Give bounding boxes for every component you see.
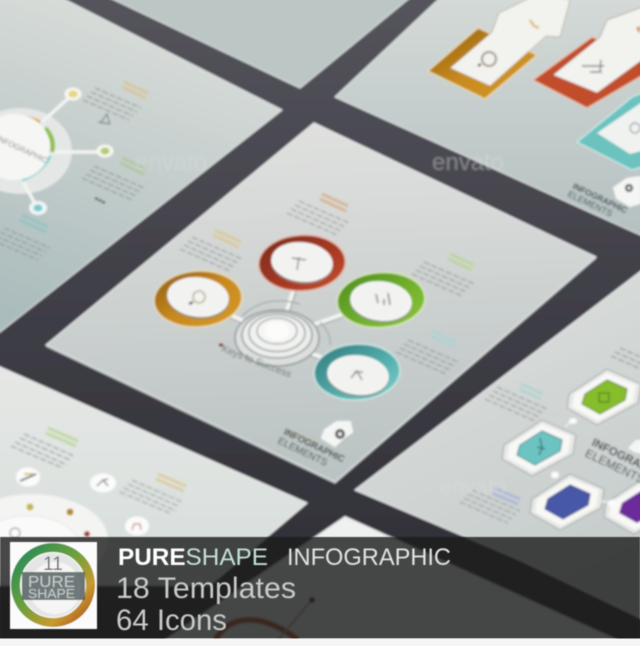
logo thumbnail xyxy=(10,542,97,629)
diagram: connector with node xyxy=(278,602,310,640)
watermark: envato xyxy=(432,149,504,176)
connector: green to hub xyxy=(310,311,352,328)
logo thumbnail: 11 xyxy=(43,554,63,575)
text: icons count: 64 Icons xyxy=(116,604,227,637)
node: red scales xyxy=(257,233,347,293)
panel: bottom left card xyxy=(0,365,307,586)
icon: tools xyxy=(376,293,390,305)
icon: tools bubble xyxy=(16,468,40,486)
logo thumbnail: SHAPE xyxy=(28,587,75,601)
logo thumbnail: PURE xyxy=(28,574,75,591)
bottom banner xyxy=(0,537,640,646)
diagram: hexagon green xyxy=(567,369,640,425)
text block: yellow heading xyxy=(120,474,186,514)
text block: green heading xyxy=(11,428,78,468)
diagram: white hub gear xyxy=(0,494,108,586)
icon: bulb bubble xyxy=(125,516,149,536)
text block: right heading xyxy=(412,254,474,296)
icon: bulb xyxy=(189,291,205,304)
text block: orange heading xyxy=(83,82,148,120)
diagram: orange ring arc xyxy=(213,620,298,646)
central hub: concentric rings xyxy=(235,301,330,366)
panel: top left hub diagram card xyxy=(0,0,282,334)
diagram: hexagon purple xyxy=(604,478,640,534)
white strip below banner xyxy=(0,638,640,646)
logo: infographic elements: ELEMENTS xyxy=(276,436,329,469)
connector: teal to hub xyxy=(305,351,336,365)
node: teal network xyxy=(313,342,401,402)
diagram: hexagon teal xyxy=(502,420,576,476)
panel: top right arrows card xyxy=(335,0,640,237)
diagram: hexagon blue xyxy=(530,474,604,530)
node: green tools xyxy=(335,269,427,331)
panel: top center card xyxy=(106,0,412,88)
text block: green heading xyxy=(82,158,146,200)
logo: infographic elements xyxy=(276,422,352,469)
arrow: red step xyxy=(533,6,640,108)
diagram: hub with three spokes xyxy=(0,88,114,215)
icon: small bow tie xyxy=(95,198,105,203)
text block: teal heading xyxy=(396,331,458,374)
arrow: orange step xyxy=(428,0,570,99)
text block: teal heading xyxy=(485,384,547,421)
icon: small compass xyxy=(98,114,110,124)
panel: bottom center card (behind banner) xyxy=(150,516,640,646)
marker: red key xyxy=(219,343,223,347)
panel: right hexagon card xyxy=(355,268,640,620)
logo: infographic elements: ELEMENTS xyxy=(566,189,614,219)
title: pureshape infographic: INFOGRAPHIC xyxy=(287,544,451,571)
icon: network bubble xyxy=(90,474,116,492)
connector: red to hub xyxy=(284,285,297,320)
title: pureshape infographic xyxy=(118,544,451,571)
caption: keys to success: Keys to Success xyxy=(220,344,293,380)
watermark: envato xyxy=(135,149,207,176)
logo: infographic elements: INFOGRAPHIC xyxy=(282,427,346,465)
text block: blue heading xyxy=(460,488,520,523)
text block: teal heading xyxy=(0,215,50,260)
panel: center main card xyxy=(46,123,596,484)
title: pureshape infographic: PURESHAPE xyxy=(118,544,268,571)
watermark: envato xyxy=(440,474,506,499)
text block: top right xyxy=(611,348,640,369)
text block: left heading xyxy=(180,230,242,271)
icon: scales xyxy=(292,257,306,270)
connectors between hexagons xyxy=(551,418,616,506)
node: orange bulb xyxy=(152,268,244,330)
text block: top heading xyxy=(287,194,349,235)
arrow: teal step xyxy=(577,92,640,170)
icon: network xyxy=(351,371,363,380)
logo: infographic elements: INFOGRAPHIC xyxy=(571,181,629,215)
watermark: envato xyxy=(118,478,184,503)
text: templates count: 18 Templates xyxy=(116,572,296,605)
logo: infographic elements xyxy=(566,177,640,219)
connector: orange to hub xyxy=(222,311,264,333)
